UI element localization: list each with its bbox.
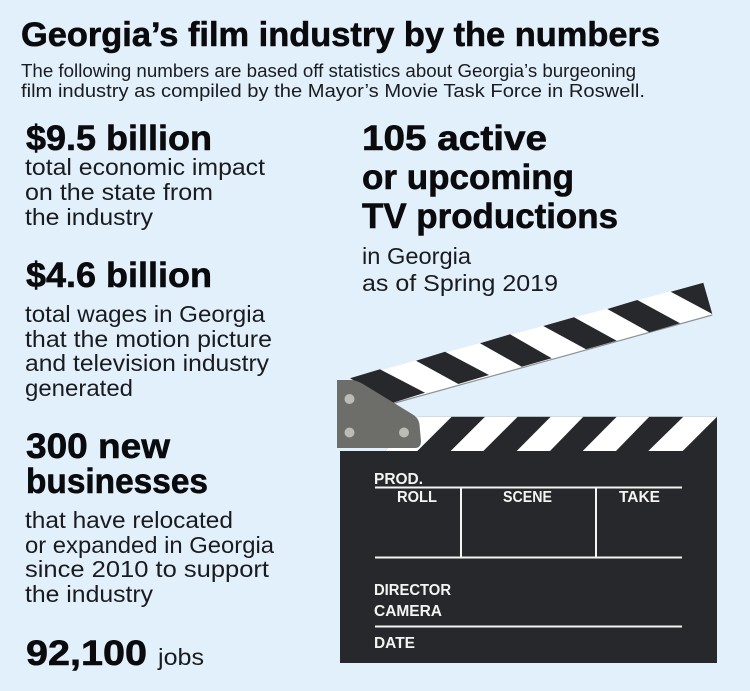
stat: 92,100 jobs: jobs (157, 644, 204, 670)
stat: 300 new businesses: since 2010 to support (25, 556, 269, 582)
stat: $4.6 billion (25, 256, 272, 401)
stat: 105 TV productions: TV productions (362, 197, 618, 236)
stat: $4.6 billion: $4.6 billion (26, 256, 212, 295)
slate labels: DATE (374, 635, 415, 652)
icon: film clapperboard (337, 282, 717, 663)
stat: $4.6 billion: and television industry (25, 350, 269, 376)
stat: 92,100 jobs (26, 634, 204, 673)
stat: 105 TV productions: as of Spring 2019 (362, 270, 558, 296)
slate labels: SCENE (503, 489, 552, 506)
clapper stick (350, 282, 712, 404)
stat: 300 new businesses: the industry (25, 581, 153, 607)
slate labels (374, 471, 660, 652)
subtitle: film industry as compiled by the Mayor’s Movie Task Force in Roswell. (21, 80, 645, 101)
slate labels: PROD. (374, 471, 423, 488)
stat: $4.6 billion: total wages in Georgia (25, 301, 266, 327)
subtitle: The following numbers are based off statistics about Georgia’s burgeoning (21, 60, 636, 81)
slate labels: DIRECTOR (374, 582, 451, 599)
title: Georgia’s film industry by the numbers (21, 16, 660, 54)
stat: 105 TV productions: 105 active (362, 119, 547, 158)
slate labels: TAKE (619, 489, 660, 506)
stat: 92,100 jobs: 92,100 (26, 634, 147, 673)
stat: 300 new businesses: that have relocated (25, 507, 233, 533)
stat: 300 new businesses: 300 new (26, 427, 171, 466)
stat: 105 TV productions: in Georgia (362, 243, 472, 269)
slate labels: ROLL (397, 489, 437, 506)
stat: $9.5 billion: $9.5 billion (26, 119, 212, 158)
stat: $9.5 billion: the industry (25, 204, 153, 230)
stat: 300 new businesses: businesses (26, 462, 208, 501)
stat: 105 TV productions (362, 119, 618, 296)
subtitle (21, 60, 645, 101)
stat: $9.5 billion: total economic impact (25, 154, 265, 180)
stat: 300 new businesses (25, 427, 275, 607)
stat: 105 TV productions: or upcoming (362, 158, 574, 197)
stat: $9.5 billion (25, 119, 265, 230)
stat: 300 new businesses: or expanded in Georgia (25, 532, 275, 558)
slate labels: CAMERA (374, 603, 442, 620)
stat: $9.5 billion: on the state from (25, 179, 213, 205)
board body (340, 417, 717, 663)
hinge plate (337, 380, 421, 448)
slate grid lines (375, 488, 682, 626)
stat: $4.6 billion: that the motion picture (25, 326, 272, 352)
stat: $4.6 billion: generated (25, 375, 133, 401)
